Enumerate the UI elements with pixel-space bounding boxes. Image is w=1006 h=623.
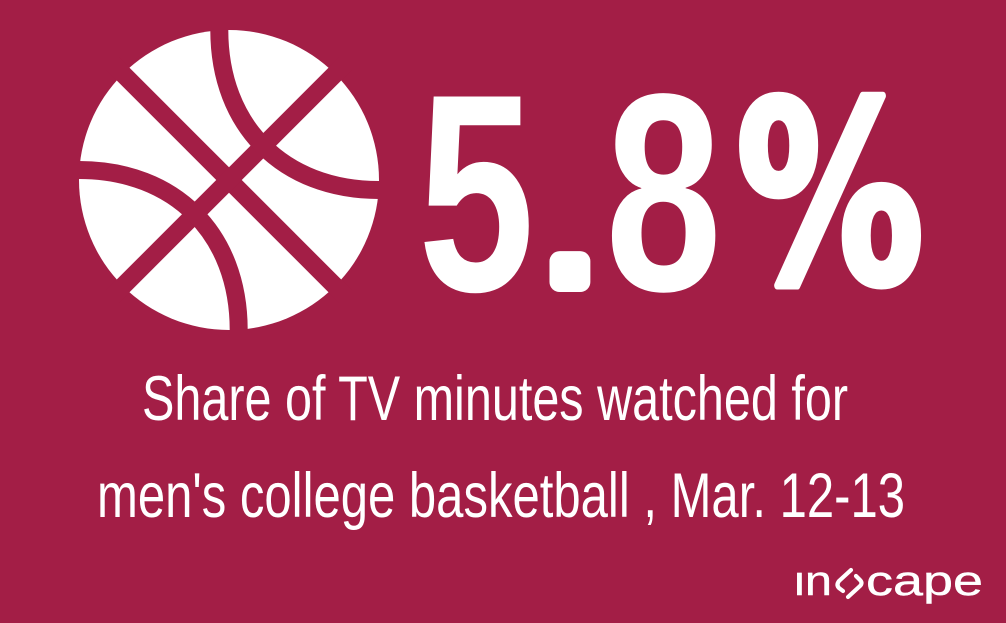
big number: 5.8%: 5 [418,36,535,350]
logo: inscape: cape [866,557,983,604]
logo: inscape [797,568,981,604]
big number: 5.8%: 8 [605,35,722,350]
big number: 5.8%: % [736,50,924,342]
logo: inscape: in [794,557,832,604]
caption [97,364,905,531]
icon: basketball [73,25,385,335]
big number: 5.8% [418,35,924,350]
big number: 5.8%: . [550,155,590,312]
